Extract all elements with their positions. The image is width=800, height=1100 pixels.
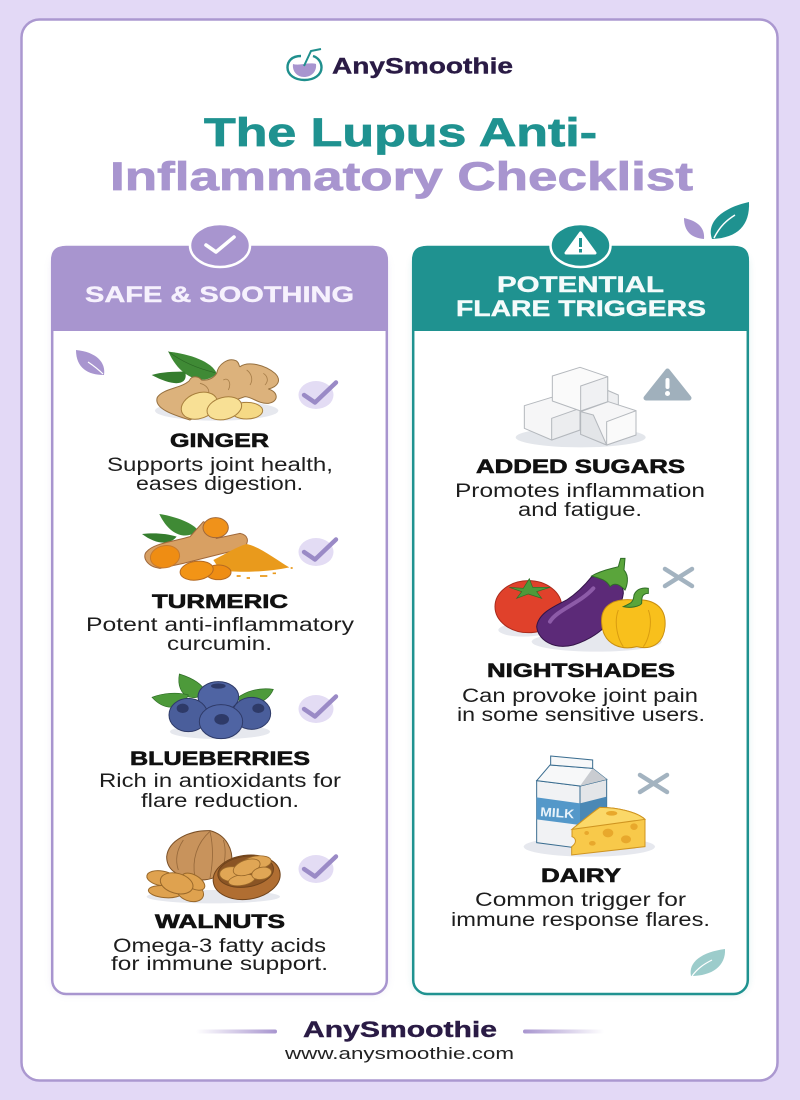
panel heading: FLARE TRIGGERS [456, 296, 706, 321]
icon: warning badge [550, 224, 610, 267]
illustration: turmeric [142, 514, 293, 582]
name: GINGER [170, 431, 269, 452]
description: for immune support. [111, 954, 328, 975]
description: eases digestion. [136, 474, 303, 495]
panel heading [456, 272, 706, 321]
description: and fatigue. [518, 500, 642, 521]
item: nightshades [457, 558, 705, 726]
item: dairy [451, 756, 710, 931]
footer [196, 1017, 604, 1063]
description: flare reduction. [141, 791, 299, 812]
description [99, 771, 342, 812]
description: Can provoke joint pain [462, 686, 698, 707]
description: Promotes inflammation [455, 481, 705, 502]
check mark [298, 695, 336, 723]
icon: x mark [665, 569, 692, 586]
brand name: AnySmoothie [332, 54, 513, 78]
header bar [51, 246, 388, 331]
description [455, 481, 705, 521]
title: Inflammatory Checklist [110, 155, 693, 199]
description: Potent anti-inflammatory [86, 615, 355, 636]
description: curcumin. [167, 634, 272, 655]
icon: leaf [691, 949, 725, 976]
description: Rich in antioxidants for [99, 771, 342, 792]
description [111, 936, 328, 975]
title [110, 111, 693, 199]
divider left [196, 1030, 277, 1034]
name: BLUEBERRIES [130, 749, 310, 770]
icon: check badge [190, 224, 250, 267]
item: added sugars [455, 367, 705, 521]
icon: leaf [76, 350, 104, 375]
header bar [412, 246, 749, 331]
panel heading: SAFE & SOOTHING [85, 282, 354, 307]
illustration: walnuts [146, 831, 283, 905]
icon: smoothie cup [288, 49, 322, 80]
illustration: milk carton and cheese [524, 756, 655, 857]
item: walnuts [111, 831, 336, 975]
illustration: sugar cubes [516, 367, 646, 447]
name: TURMERIC [152, 592, 288, 613]
icon: x mark [640, 775, 667, 792]
panel: potential flare triggers [412, 224, 749, 994]
description: Omega-3 fatty acids [113, 936, 326, 957]
illustration: tomato, eggplant, pepper [495, 558, 665, 652]
icon: decorative leaves [684, 202, 749, 239]
item: turmeric [86, 514, 355, 655]
check mark [298, 538, 336, 566]
panel: safe and soothing [51, 224, 388, 994]
illustration: ginger [152, 352, 278, 424]
check mark [298, 855, 336, 883]
title: The Lupus Anti- [204, 111, 597, 155]
description: immune response flares. [451, 910, 710, 931]
description [86, 615, 355, 655]
illustration: blueberries [152, 674, 273, 739]
description [107, 455, 333, 495]
footer brand: AnySmoothie [303, 1017, 497, 1042]
description: Common trigger for [475, 890, 687, 911]
description: in some sensitive users. [457, 705, 705, 726]
item: ginger [107, 352, 336, 495]
check mark [298, 381, 336, 409]
name: DAIRY [541, 866, 621, 887]
name: ADDED SUGARS [476, 457, 685, 478]
description: Supports joint health, [107, 455, 333, 476]
footer url: www.anysmoothie.com [284, 1044, 514, 1063]
description [457, 686, 705, 726]
name: NIGHTSHADES [487, 661, 675, 682]
illustration: milk carton and cheese: MILK [540, 805, 576, 821]
description [451, 890, 710, 931]
item: blueberries [99, 674, 342, 812]
icon: warning triangle [646, 371, 689, 398]
name: WALNUTS [155, 912, 285, 933]
panel heading: POTENTIAL [497, 272, 664, 297]
divider right [523, 1030, 604, 1034]
logo [288, 49, 513, 80]
